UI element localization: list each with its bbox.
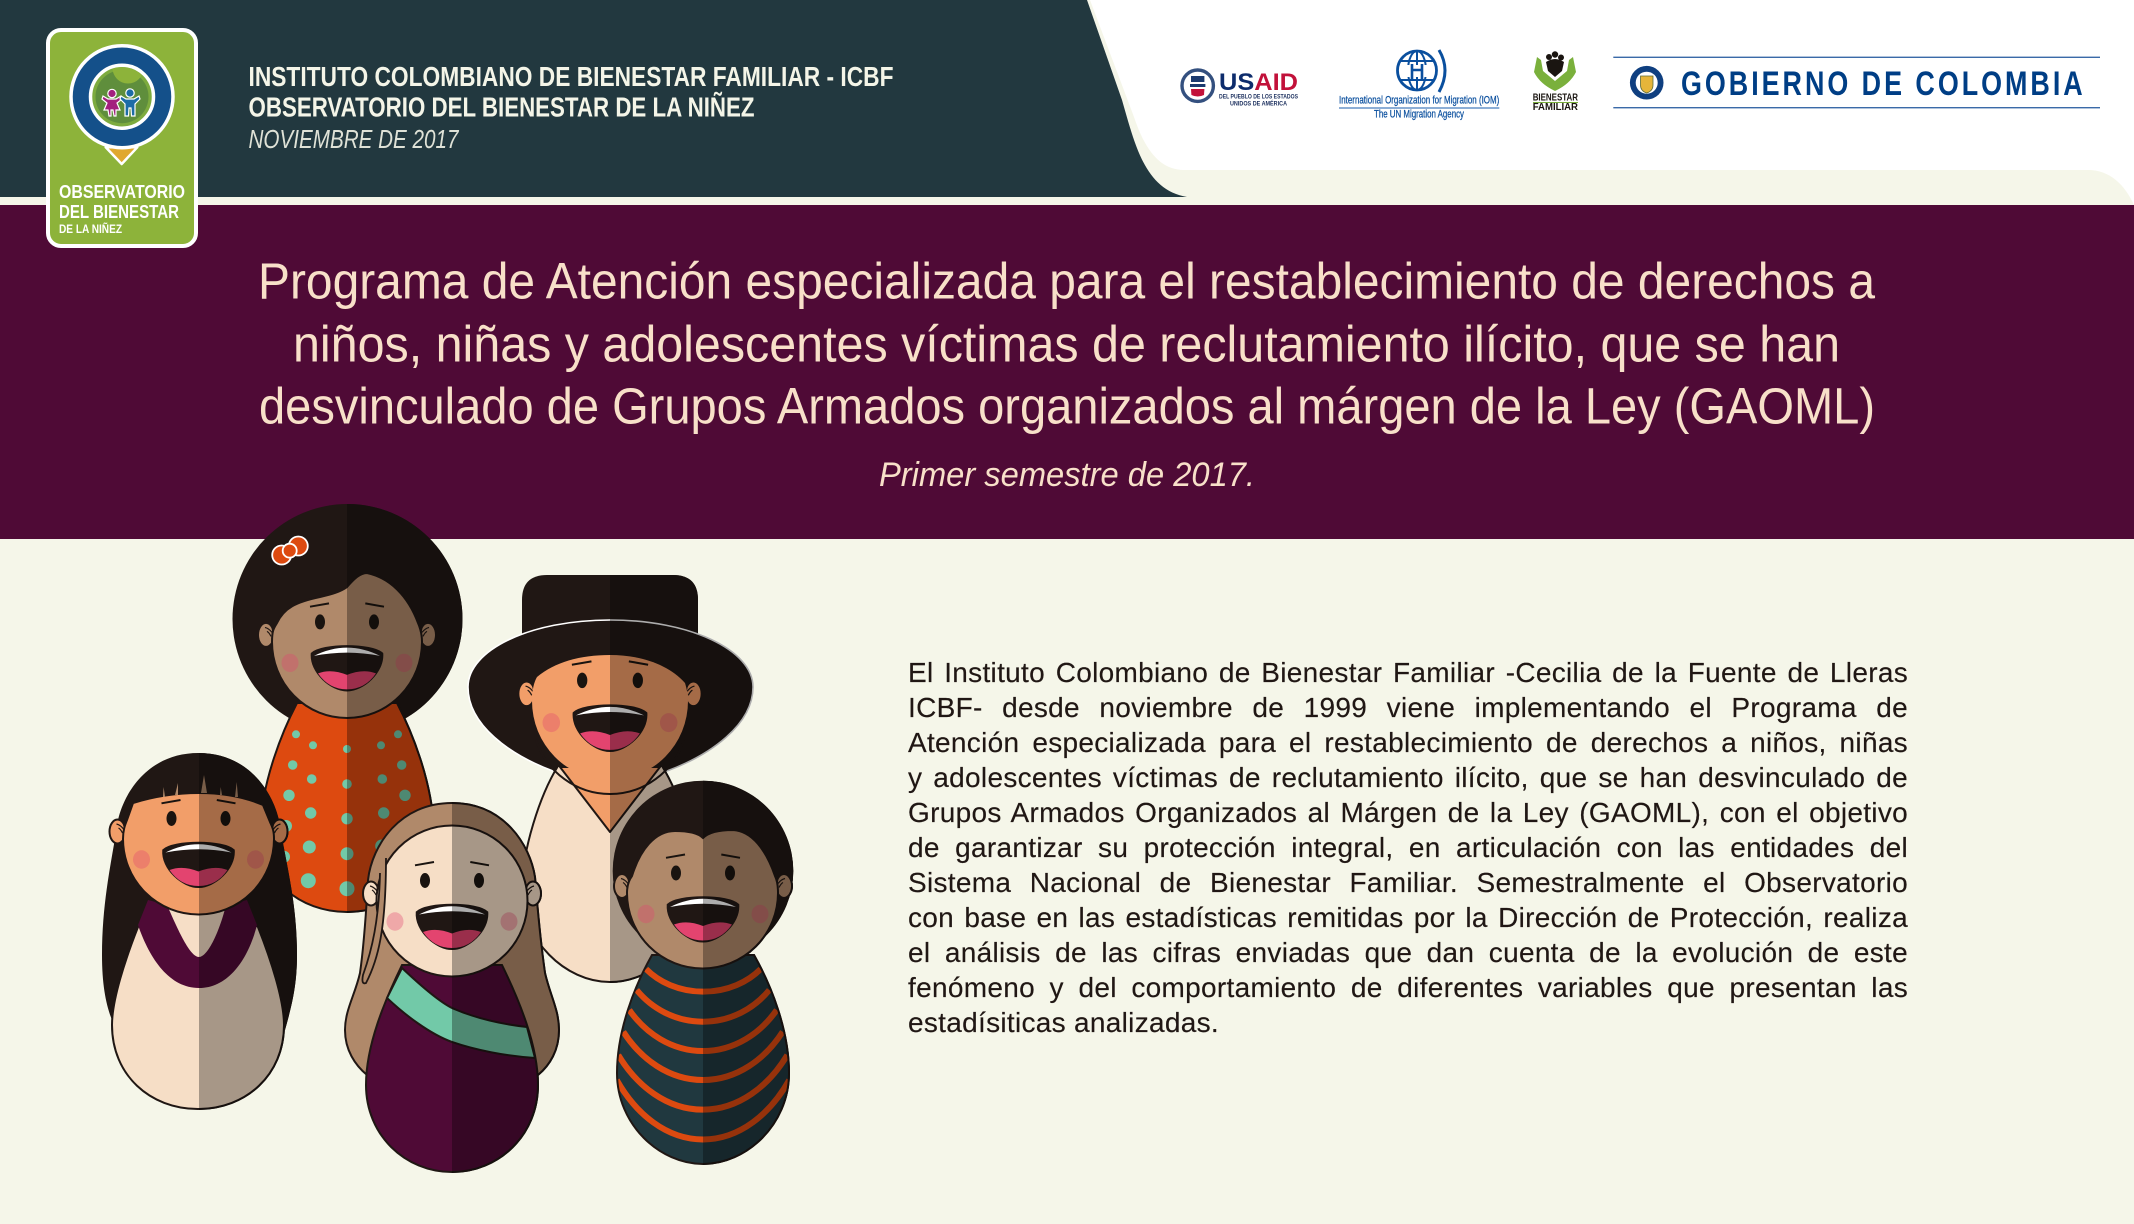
white shirt bbox=[522, 766, 698, 982]
body text: de garantizar su protección integral, en articulación con las entidades del bbox=[908, 832, 1908, 862]
figure: boy with striped shirt bbox=[613, 781, 793, 1164]
pin icon bbox=[71, 46, 173, 164]
title: Programa de Atención especializada para el restablecimiento de derechos a bbox=[258, 252, 1876, 310]
afro hair bbox=[232, 504, 462, 734]
hat brim bbox=[468, 620, 753, 771]
body text: y adolescentes víctimas de reclutamiento ilícito, que se han desvinculado de bbox=[908, 762, 1908, 792]
logo: IOM bbox=[1339, 50, 1499, 120]
logo: Bienestar Familiar bbox=[1533, 51, 1579, 113]
body text: ICBF- desde noviembre de 1999 viene implementando el Programa de bbox=[908, 692, 1908, 722]
logo: USAID: DEL PUEBLO DE LOS ESTADOS bbox=[1219, 94, 1298, 100]
face bbox=[532, 655, 688, 780]
face bbox=[272, 573, 422, 718]
logo: Bienestar Familiar: FAMILIAR bbox=[1533, 102, 1579, 113]
logo: Observatorio del Bienestar badge bbox=[48, 30, 196, 246]
dotted dress bbox=[260, 703, 434, 912]
header text bbox=[248, 61, 894, 154]
title: niños, niñas y adolescentes víctimas de reclutamiento ilícito, que se han bbox=[293, 316, 1840, 373]
header dark panel bbox=[0, 0, 1187, 197]
body text: estadísiticas analizadas. bbox=[908, 1006, 1219, 1038]
logo: USAID: USAID bbox=[1219, 69, 1298, 96]
body text: Grupos Armados Organizados al Márgen de la Ley (GAOML), con el objetivo bbox=[908, 796, 1908, 828]
shirt collar bbox=[560, 767, 660, 832]
logo: Bienestar Familiar: BIENESTAR bbox=[1533, 93, 1579, 104]
figure: girl with long light-brown hair and sash bbox=[345, 803, 559, 1172]
badge text: OBSERVATORIO bbox=[59, 182, 185, 202]
hair bow bbox=[272, 536, 308, 564]
body text: el análisis de las cifras enviadas que dan cuenta de la evolución de este bbox=[908, 936, 1908, 968]
body text bbox=[908, 656, 1908, 1038]
body text: Sistema Nacional de Bienestar Familiar. Semestralmente el Observatorio bbox=[908, 866, 1908, 898]
hair bbox=[613, 781, 793, 961]
face bbox=[123, 793, 274, 914]
hat crown bbox=[522, 575, 698, 640]
subtitle: Primer semestre de 2017. bbox=[879, 456, 1255, 494]
title: desvinculado de Grupos Armados organizados al márgen de la Ley (GAOML) bbox=[259, 377, 1875, 434]
long hair bbox=[102, 753, 297, 1030]
long hair bbox=[345, 803, 559, 1075]
dress bbox=[112, 900, 284, 1109]
purple dress bbox=[366, 965, 538, 1172]
header text: INSTITUTO COLOMBIANO DE BIENESTAR FAMILIAR - ICBF bbox=[248, 61, 894, 92]
title bbox=[258, 252, 1876, 434]
figure: girl with afro and orange dotted dress bbox=[232, 504, 462, 912]
green sash bbox=[387, 968, 535, 1058]
striped shirt bbox=[617, 955, 789, 1164]
face bbox=[376, 826, 528, 976]
body text: El Instituto Colombiano de Bienestar Familiar -Cecilia de la Fuente de Lleras bbox=[908, 656, 1908, 688]
logo: USAID: UNIDOS DE AMÉRICA bbox=[1230, 100, 1288, 108]
figure: man with black hat bbox=[468, 575, 753, 982]
body text: fenómeno y del comportamiento de diferentes variables que presentan las bbox=[908, 972, 1908, 1002]
badge text bbox=[59, 182, 185, 236]
badge text: DE LA NIÑEZ bbox=[59, 221, 122, 236]
logo: Gobierno de Colombia bbox=[1613, 57, 2100, 108]
header text: OBSERVATORIO DEL BIENESTAR DE LA NIÑEZ bbox=[248, 92, 754, 122]
face bbox=[627, 830, 778, 968]
logo: IOM: International Organization for Migration (IOM) bbox=[1339, 94, 1499, 106]
header text: NOVIEMBRE DE 2017 bbox=[248, 124, 460, 154]
hair strand bbox=[362, 858, 386, 983]
purple scarf bbox=[138, 900, 257, 988]
logo: IOM: The UN Migration Agency bbox=[1374, 108, 1464, 120]
body text: Atención especializada para el restablecimiento de derechos a niños, niñas bbox=[908, 726, 1908, 758]
title band bbox=[0, 205, 2134, 539]
logo: Gobierno de Colombia: GOBIERNO DE COLOMBIA bbox=[1681, 64, 2083, 103]
body text: con base en las estadísticas remitidas por la Dirección de Protección, realiza bbox=[908, 902, 1908, 932]
badge text: DEL BIENESTAR bbox=[59, 202, 179, 222]
logo: USAID bbox=[1182, 69, 1298, 108]
figure: girl with long black hair and fringe bbox=[102, 753, 297, 1109]
header white logo area bbox=[1090, 0, 2134, 205]
